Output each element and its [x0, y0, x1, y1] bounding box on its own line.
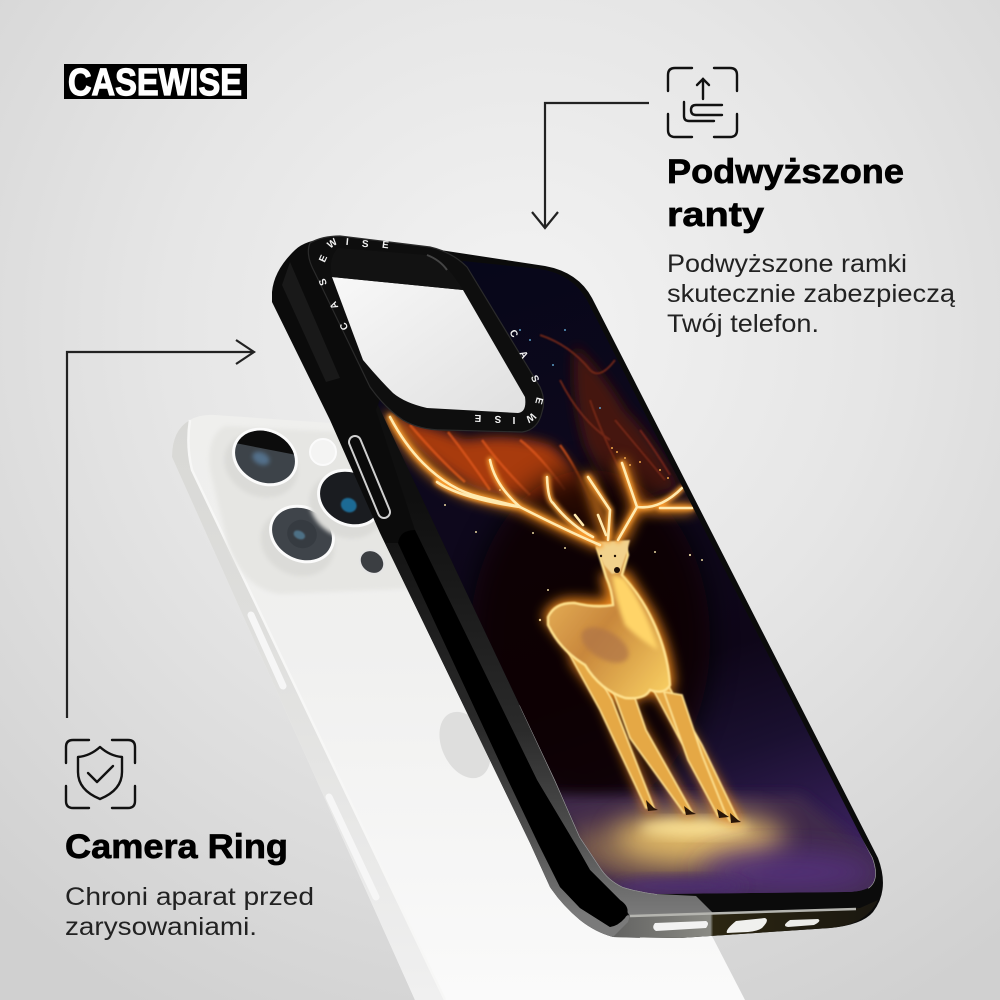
rim next to screen: [376, 405, 714, 917]
side sheen: [282, 262, 340, 382]
bottom face: [613, 900, 878, 938]
right edge sheen: [800, 730, 875, 888]
port: right: [785, 919, 819, 927]
camera plateau: [209, 426, 425, 594]
text: raised edges description: skutecznie zabezpieczą: [667, 280, 955, 308]
heading: Camera Ring: Camera Ring: [65, 828, 288, 866]
ring logo text: W: [326, 236, 340, 251]
highlight line: [630, 909, 856, 916]
ring hole: [332, 277, 525, 413]
ring logo text: E: [532, 396, 545, 406]
port: center: [727, 918, 767, 933]
side slot: [398, 530, 628, 927]
antler core: [390, 417, 692, 545]
sparks: [611, 447, 669, 479]
screen edge highlight: [520, 705, 657, 894]
port: left: [653, 921, 708, 931]
text: camera ring description: zarysowaniami.: [65, 913, 257, 941]
ring logo text: S: [361, 239, 369, 250]
outer edge strip: [385, 543, 640, 938]
ring logo text: A: [328, 299, 341, 311]
antler glow: [390, 417, 692, 545]
ring logo text: S: [528, 374, 541, 385]
phone back panel: [172, 415, 745, 1000]
phone side band: [172, 420, 445, 1000]
ring logo text: I: [512, 414, 515, 425]
deer: glow: [390, 417, 735, 820]
flash: [310, 439, 336, 465]
heading: Podwyższone ranty: [667, 153, 904, 234]
ring logo text: S: [494, 413, 501, 424]
red wisps: [540, 335, 670, 480]
ring logo text: C: [338, 320, 351, 332]
arrow: camera ring: [67, 340, 254, 718]
stars: [444, 489, 703, 629]
text: raised edges description: [667, 250, 955, 338]
side edge highlight: [188, 420, 445, 1000]
artwork screen: [378, 261, 876, 894]
blue stars: [519, 329, 601, 409]
flames: [390, 345, 680, 530]
volume button: [355, 442, 384, 512]
head: [594, 540, 630, 574]
ring logo text: E: [317, 253, 330, 264]
text: camera ring description: [65, 883, 314, 941]
ground glow: [540, 795, 880, 900]
black phone case: [272, 236, 900, 938]
ring logo text: S: [317, 277, 330, 287]
ring logo text: W: [523, 410, 537, 425]
heading: Podwyższone ranty: Podwyższone: [667, 153, 904, 191]
lens: top: [213, 415, 311, 510]
deer: antlers: [390, 417, 692, 545]
white phone: [172, 415, 745, 1000]
logo: CASEWISE: CASEWISE: [68, 62, 242, 104]
case shell: [272, 238, 883, 938]
ring logo text: [317, 236, 545, 425]
side buttons: [251, 615, 376, 897]
deer: body: [548, 540, 741, 823]
apple logo: [429, 704, 501, 786]
ring logo text: E: [381, 240, 390, 251]
torso and neck: [548, 543, 670, 698]
text: raised edges description: Twój telefon.: [667, 310, 819, 338]
text: camera ring description: Chroni aparat przed: [65, 883, 314, 911]
dark halo: [470, 470, 710, 810]
flame streaks: [410, 425, 590, 500]
ring logo text: I: [345, 237, 349, 248]
legs: [566, 648, 738, 821]
arrow: raised edges: [532, 103, 649, 228]
ring logo text: A: [517, 349, 530, 361]
neck highlight: [612, 575, 658, 650]
heading: Podwyższone ranty: ranty: [667, 196, 764, 234]
lens: bottom: [249, 492, 348, 588]
ring logo text: E: [474, 412, 481, 423]
inner wall sheen: [427, 255, 447, 270]
flank shading: [581, 626, 630, 664]
lens: right: [298, 456, 396, 551]
inner wall: [331, 248, 463, 290]
icon: raised edges: [668, 68, 737, 137]
ring logo text: C: [507, 328, 520, 340]
hooves: [646, 800, 741, 823]
icon: shield check: [66, 740, 135, 808]
face: [600, 555, 620, 573]
camera ring: [308, 236, 545, 432]
text: raised edges description: Podwyższone ramki: [667, 250, 907, 278]
sensor: [355, 545, 389, 579]
